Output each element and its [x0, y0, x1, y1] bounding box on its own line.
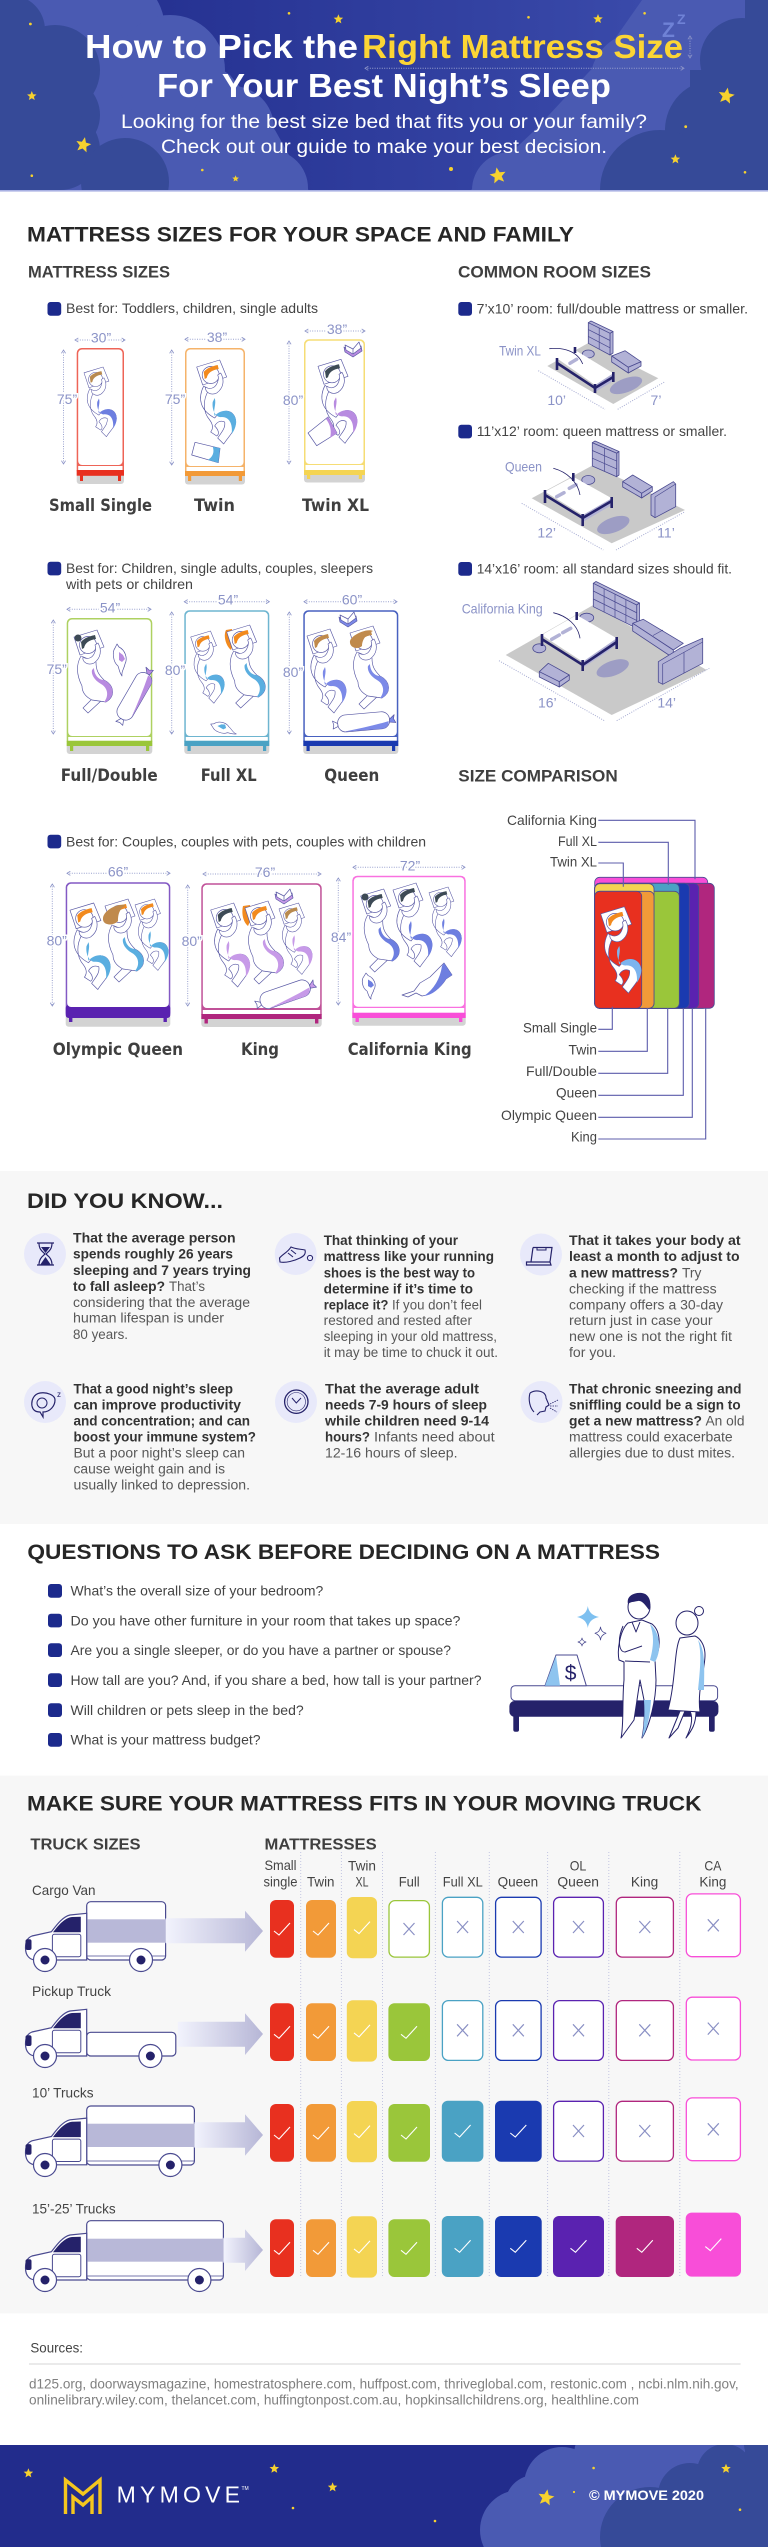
sources: d125.org, doorwaysmagazine, homestratosphere.com, huffpost.com, thriveglobal.com, restonic.com , ncbi.nlm.nih.gov,: [29, 2376, 739, 2391]
sources: Sources:: [30, 2339, 83, 2355]
fact: sneezing: allergies due to dust mites.: [569, 1446, 735, 1461]
fact: hours of sleep: needs 7-9 hours of sleep: [325, 1397, 487, 1412]
question list: Do you have other furniture in your room that takes up space?: [70, 1612, 461, 1628]
column headers: single: [264, 1874, 298, 1890]
panel: mattress sizes: [28, 264, 472, 1060]
fact: running shoes: replace it?: [324, 1297, 388, 1312]
bed: full xl: Full XL: [201, 766, 257, 786]
bed: twin xl: 80”: [283, 392, 303, 408]
fact: hourglass: spends roughly 26 years: [73, 1247, 233, 1262]
logo: mymove: TM: [242, 2486, 249, 2492]
bed: full double: 54”: [100, 600, 120, 616]
icon: sleeping head: z: [57, 1390, 61, 1399]
logo: mymove: [66, 2480, 249, 2514]
stacked mattress chart: [595, 877, 714, 1008]
sources: onlinelibrary.wiley.com, thelancet.com, huffingtonpost.com.au, hopkinsallchildrens.org, healthline.com: [29, 2392, 639, 2407]
fact: good night's sleep: [24, 1381, 256, 1493]
subheading: mattress sizes: MATTRESS SIZES: [28, 264, 170, 282]
fact: hourglass: to fall asleep?: [73, 1279, 165, 1294]
column headers: [264, 1857, 726, 1890]
truck: 15 to 25 foot: 15’-25’ Trucks: [32, 2200, 116, 2216]
room 2 illustration: 12’: [537, 524, 556, 540]
comparison labels and leaders: Twin XL: [550, 854, 597, 870]
bed: king: [182, 864, 322, 1060]
section heading: mattress sizes for your space and family: MATTRESS SIZES FOR YOUR SPACE AND FAMILY: [27, 224, 574, 247]
fact: adjust to mattress: Try: [682, 1265, 702, 1280]
fact: hours of sleep: 12-16 hours of sleep.: [325, 1446, 458, 1461]
illustration: couple choosing a mattress: [509, 1593, 718, 1738]
icon: notebook: [520, 1234, 562, 1276]
fact: adjust to mattress: return just in case your: [569, 1313, 713, 1328]
bed: small single: 75”: [57, 391, 77, 407]
column headers: Queen: [557, 1874, 599, 1890]
truck: 10 foot: 10’ Trucks: [32, 2084, 94, 2100]
title: Right Mattress Size: [362, 28, 683, 65]
fact: adjust to mattress: a new mattress?: [569, 1265, 678, 1280]
group 2 best for: Best for: Children, single adults, couples, sleepers: [66, 560, 373, 576]
bed: full xl: [165, 592, 269, 786]
fact: running shoes: mattress like your running: [324, 1249, 494, 1264]
room 2 illustration: 11’: [657, 524, 675, 540]
arrow: 15 to 25 foot: [223, 2229, 263, 2271]
arrow: 10 foot: [194, 2114, 263, 2156]
truck: cargo van: Cargo Van: [32, 1882, 96, 1898]
bed: olympic queen: Olympic Queen: [53, 1040, 183, 1060]
arrow: cargo van: [166, 1911, 263, 1952]
fact: adjust to mattress: [520, 1233, 741, 1360]
bed: california king: 84”: [331, 929, 351, 945]
row: cargo van fit: [270, 1894, 740, 1958]
bed: queen: 80”: [283, 664, 303, 680]
subtitle: Looking for the best size bed that fits you or your family?: [121, 112, 647, 133]
bed: olympic queen: 80”: [47, 933, 67, 949]
panel: questions: [27, 1541, 718, 1748]
fact: running shoes: [275, 1233, 498, 1360]
panel: did you know: [0, 1171, 768, 1524]
icon: sleep zz and dimension arrows: Z: [677, 11, 686, 27]
fact: hours of sleep: [275, 1381, 495, 1461]
fact: good night's sleep: and concentration; and can: [74, 1413, 250, 1428]
column headers: King: [631, 1874, 658, 1890]
bed: king: 80”: [182, 933, 202, 949]
bed: twin: 38”: [207, 329, 227, 345]
room 1 illustration: 7’: [651, 392, 661, 408]
fact: good night's sleep: That a good night’s sleep: [74, 1381, 233, 1396]
room 2 caption: 11’x12’ room: queen mattress or smaller.: [477, 423, 727, 439]
fact: running shoes: restored and rested after: [324, 1313, 472, 1328]
bed: olympic queen: [47, 864, 183, 1060]
footer: [0, 2445, 768, 2547]
column headers: CA: [704, 1858, 722, 1874]
room 2 illustration: Queen: [505, 459, 542, 475]
header banner: [0, 0, 768, 192]
fact: sneezing: That chronic sneezing and: [569, 1381, 742, 1396]
question list: How tall are you? And, if you share a bed, how tall is your partner?: [70, 1672, 482, 1688]
comparison labels and leaders: Olympic Queen: [501, 1107, 597, 1123]
arrow: pickup truck: [178, 2013, 263, 2055]
panel: size comparison: [458, 768, 714, 1145]
comparison labels and leaders: Twin: [568, 1041, 597, 1057]
fact: good night's sleep: But a poor night’s sleep can: [74, 1446, 245, 1461]
sleeper on small single: [601, 907, 641, 993]
column headers: Twin: [307, 1874, 334, 1890]
fact: hourglass: sleeping and 7 years trying: [73, 1263, 251, 1278]
group 2 best for: [48, 560, 373, 592]
panel: moving truck: [0, 1776, 768, 2313]
bed: full xl: 80”: [165, 662, 185, 678]
subheading: mattresses: MATTRESSES: [264, 1836, 377, 1853]
bed: queen: [283, 592, 398, 786]
comparison labels and leaders: California King: [507, 812, 597, 828]
room 3 illustration: 14’: [657, 694, 676, 710]
copyright: © MYMOVE 2020: [589, 2487, 704, 2503]
bed: california king: [331, 858, 472, 1060]
bed: full xl: 54”: [218, 592, 238, 608]
bed: twin xl: Twin XL: [302, 496, 369, 516]
truck: 10 foot: [26, 2084, 194, 2176]
bed: full double: Full/Double: [61, 766, 158, 786]
illustration: couple choosing a mattress: $: [565, 1662, 577, 1685]
question list: Will children or pets sleep in the bed?: [70, 1702, 304, 1718]
fact: running shoes: shoes is the best way to: [324, 1265, 475, 1280]
fact: good night's sleep: can improve productivity: [74, 1397, 242, 1412]
icon: sleep zz and dimension arrows: [365, 11, 690, 68]
fact: sneezing: sniffling could be a sign to: [569, 1397, 741, 1412]
column headers: King: [699, 1874, 726, 1890]
fact: sneezing: [520, 1381, 744, 1461]
bed: king: 76”: [255, 864, 275, 880]
bed: california king: California King: [348, 1040, 472, 1060]
stars: [24, 2464, 741, 2522]
bed: twin xl: [283, 321, 369, 516]
fact: good night's sleep: cause weight gain and is: [74, 1462, 225, 1477]
row: 15 to 25 foot fit: [270, 2213, 741, 2278]
fact: adjust to mattress: checking if the mattress: [569, 1281, 717, 1296]
bed: small single: Small Single: [49, 496, 152, 516]
bed: small single: 30”: [91, 330, 111, 346]
fact: good night's sleep: usually linked to depression.: [74, 1478, 250, 1493]
fact: sneezing: An old: [706, 1413, 744, 1428]
column headers: Full XL: [443, 1874, 483, 1890]
room 3 illustration: California King: [462, 600, 543, 616]
subtitle: [121, 112, 647, 158]
heading: questions: QUESTIONS TO ASK BEFORE DECIDING ON A MATTRESS: [27, 1541, 660, 1564]
icon: sneezing face: [520, 1381, 562, 1423]
heading: did you know: DID YOU KNOW...: [27, 1190, 223, 1213]
title: [85, 28, 683, 104]
fact: adjust to mattress: That it takes your body at: [569, 1233, 741, 1248]
bed: full double: [47, 600, 158, 786]
fact: hours of sleep: Infants need about: [374, 1429, 495, 1444]
room 1 illustration: [499, 321, 665, 409]
icon: sleep zz and dimension arrows: Z: [662, 19, 675, 42]
room 1 illustration: 10’: [547, 392, 566, 408]
fact: hours of sleep: while children need 9-14: [324, 1413, 490, 1428]
column headers: Small: [264, 1857, 296, 1873]
fact: running shoes: it may be time to chuck it out.: [324, 1345, 498, 1360]
panel: common room sizes: [458, 264, 748, 721]
comparison labels and leaders: Small Single: [523, 1020, 597, 1036]
subtitle: Check out our guide to make your best decision.: [161, 137, 607, 158]
question list: Are you a single sleeper, or do you have a partner or spouse?: [70, 1642, 451, 1658]
icon: shoe: [275, 1233, 317, 1275]
fact: adjust to mattress: least a month to adjust to: [569, 1249, 740, 1264]
column headers: Twin: [348, 1858, 376, 1874]
fact: hours of sleep: hours?: [325, 1429, 370, 1444]
group 1 best for: Best for: Toddlers, children, single adults: [66, 300, 318, 316]
bed: queen: 60”: [342, 592, 362, 608]
column headers: Full: [399, 1874, 420, 1890]
fact: hourglass: That the average person: [73, 1231, 236, 1246]
subheading: common room sizes: COMMON ROOM SIZES: [458, 264, 651, 282]
fact: hourglass: human lifespan is under: [73, 1311, 225, 1326]
bed: california king: 72”: [400, 858, 420, 874]
bed: twin xl: 38”: [327, 321, 347, 337]
room 1 illustration: Twin XL: [499, 343, 541, 359]
comparison labels and leaders: Queen: [556, 1085, 597, 1101]
bed: full double: 75”: [47, 661, 67, 677]
fact: hourglass: That’s: [169, 1279, 205, 1294]
question list: What is your mattress budget?: [70, 1732, 261, 1748]
icon: hourglass: [24, 1233, 66, 1275]
truck: pickup truck: [26, 1983, 176, 2068]
stars: [27, 12, 746, 184]
truck: pickup truck: Pickup Truck: [32, 1983, 112, 1999]
row: 10 foot fit: [270, 2098, 740, 2162]
logo: mymove: MYMOVE: [117, 2482, 240, 2508]
row: pickup truck fit: [270, 1997, 740, 2062]
bed: twin: 75”: [165, 391, 185, 407]
question list: What’s the overall size of your bedroom?: [70, 1583, 324, 1599]
bed: olympic queen: 66”: [108, 864, 128, 880]
column separators: [301, 1852, 680, 2278]
truck: cargo van: [26, 1882, 166, 1972]
room 1 caption: 7’x10’ room: full/double mattress or smaller.: [477, 300, 748, 316]
fact: sneezing: get a new mattress?: [569, 1413, 702, 1428]
fact: hourglass: considering that the average: [73, 1295, 250, 1310]
group 3 best for: Best for: Couples, couples with pets, couples with children: [66, 834, 426, 850]
column headers: XL: [356, 1874, 369, 1890]
question list: [48, 1583, 482, 1748]
column headers: OL: [570, 1858, 586, 1874]
comparison labels and leaders: [501, 812, 706, 1145]
truck: 15 to 25 foot: [26, 2200, 223, 2292]
bed: queen: Queen: [324, 766, 379, 786]
bed: twin: Twin: [194, 496, 235, 516]
fact: running shoes: That thinking of your: [324, 1233, 459, 1248]
title: For Your Best Night’s Sleep: [157, 67, 611, 104]
icon: clock: [275, 1381, 317, 1423]
room 3 illustration: 16’: [538, 694, 557, 710]
fact: hours of sleep: That the average adult: [325, 1381, 480, 1396]
room 2 illustration: [505, 441, 685, 550]
room 3 caption: 14’x16’ room: all standard sizes should fit.: [477, 560, 732, 576]
fact: hourglass: [24, 1231, 251, 1342]
heading: moving truck: MAKE SURE YOUR MATTRESS FITS IN YOUR MOVING TRUCK: [27, 1793, 701, 1816]
bed: twin: [165, 329, 245, 516]
subheading: truck sizes: TRUCK SIZES: [30, 1836, 141, 1853]
title: How to Pick the: [85, 28, 358, 65]
fact: adjust to mattress: company offers a 30-day: [569, 1297, 723, 1312]
bed: small single: [49, 330, 152, 516]
sources: [29, 2339, 741, 2407]
fact: sneezing: mattress could exacerbate: [569, 1429, 733, 1444]
fact: good night's sleep: boost your immune system?: [74, 1429, 256, 1444]
group 2 best for: with pets or children: [65, 576, 193, 592]
room 3 illustration: [462, 582, 709, 721]
fact: hourglass: 80 years.: [73, 1327, 128, 1342]
icon: sleeping head: [24, 1381, 66, 1423]
fact: adjust to mattress: new one is not the right fit: [569, 1329, 732, 1344]
fact: running shoes: sleeping in your old mattress,: [324, 1329, 497, 1344]
bed: king: King: [241, 1040, 279, 1060]
column headers: Queen: [498, 1874, 538, 1890]
fact: adjust to mattress: for you.: [569, 1345, 616, 1360]
fact: running shoes: determine if it’s time to: [324, 1281, 473, 1296]
comparison labels and leaders: Full XL: [558, 833, 597, 849]
subheading: size comparison: SIZE COMPARISON: [458, 768, 618, 786]
comparison labels and leaders: King: [571, 1129, 597, 1145]
comparison labels and leaders: Full/Double: [526, 1063, 597, 1079]
fact: running shoes: If you don’t feel: [392, 1297, 482, 1312]
